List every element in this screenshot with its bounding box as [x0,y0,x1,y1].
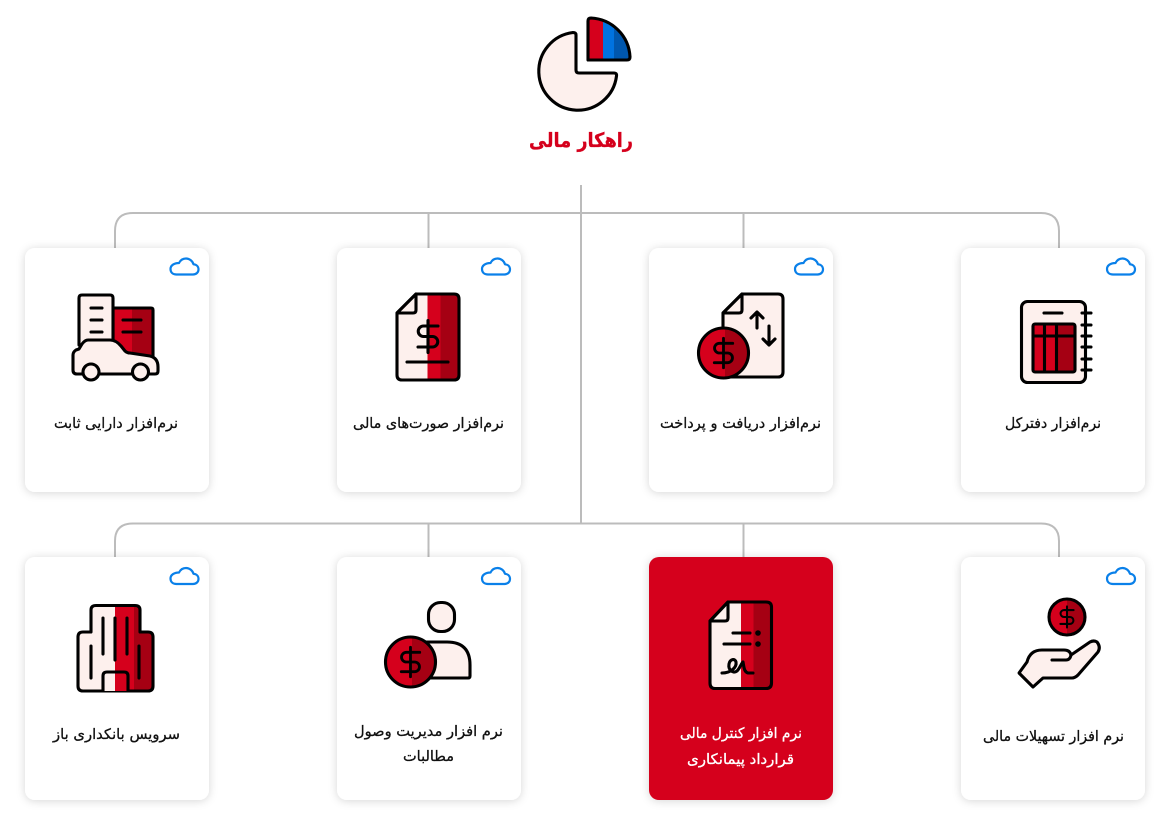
label: سرویس بانکداری باز [52,727,180,743]
label: نرم افزار تسهیلات مالی [983,729,1124,745]
icon: statement document [397,294,459,380]
panel: financial statements software [337,248,521,492]
label [354,724,503,765]
panel: fixed assets software [25,248,209,492]
label: نرم افزار مدیریت وصول [354,724,503,740]
panel: open banking service [25,557,209,800]
icon: cloud [482,568,510,584]
panel: general ledger software [961,248,1145,492]
icon: person with coin [386,602,470,687]
label: نرم افزار کنترل مالی [680,726,802,742]
connector tree [115,185,1059,557]
icon: pie chart [539,18,630,110]
panel: receivables management software [337,557,521,800]
icon: cloud [1107,568,1135,584]
icon: payment document and coin [698,294,783,378]
icon: cloud [1107,258,1135,274]
label: نرم‌افزار دریافت و پرداخت [660,416,821,432]
icon: cloud [482,258,510,274]
panel: financial facilities software [961,557,1145,800]
icon: ledger notebook [1022,302,1091,382]
icon: cloud [795,258,823,274]
icon: hand with coin [1019,599,1099,687]
icon: cloud [170,568,198,584]
icon: cloud [170,258,198,274]
label: قرارداد پیمانکاری [687,752,794,768]
title: راهکار مالی [529,128,633,152]
icon: bank buildings [78,606,153,691]
icon: building and car [73,295,158,380]
panel: receipts and payments software [649,248,833,492]
label: نرم‌افزار دفترکل [1005,416,1101,432]
label: نرم‌افزار صورت‌های مالی [353,416,504,432]
label: مطالبات [403,749,454,765]
label: نرم‌افزار دارایی ثابت [54,416,178,432]
label [680,726,802,768]
icon: contract document [710,602,772,688]
panel: financial control of construction contracts (highlighted) [649,557,833,800]
